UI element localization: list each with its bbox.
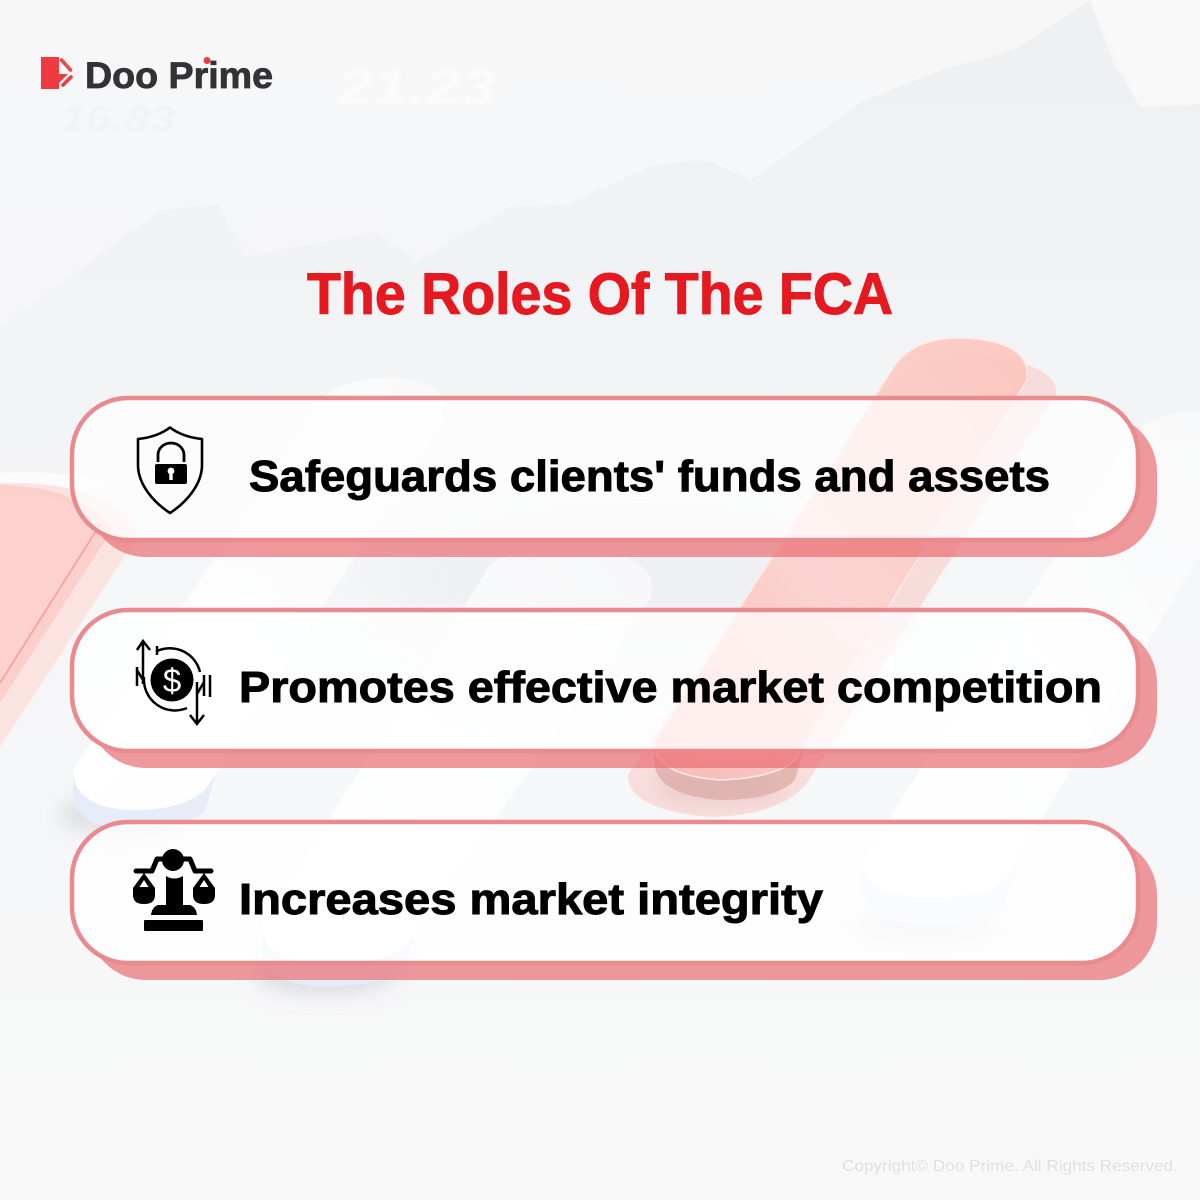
panel: competition	[72, 610, 1138, 751]
decorative red pill: centre	[628, 338, 1056, 817]
icon: balance scales	[133, 849, 215, 931]
text: safeguards: Safeguards clients' funds and assets	[249, 452, 1050, 501]
card drop shadows	[88, 414, 1157, 980]
logo: Doo Prime	[41, 55, 273, 96]
decorative white pill: middle	[255, 550, 652, 995]
logo dot	[204, 57, 210, 64]
faint background numbers: 21.23	[337, 59, 496, 115]
logo wordmark: Doo Prime	[85, 55, 273, 96]
text: competition: Promotes effective market competition	[239, 663, 1102, 712]
faint background numbers: 16.83	[60, 98, 176, 139]
text: integrity: Increases market integrity	[239, 875, 824, 924]
decorative red pill: left	[0, 472, 138, 747]
faint background numbers	[60, 59, 496, 139]
icon: logo mark	[41, 57, 71, 89]
copyright: Copyright© Doo Prime. All Rights Reserved.	[842, 1158, 1178, 1175]
icon: dollar with arrows	[137, 641, 210, 724]
icon: shield with padlock	[138, 428, 202, 513]
panel: safeguards	[72, 398, 1138, 540]
decorative white pill: left	[56, 378, 443, 835]
decorative white pill: right	[855, 412, 1200, 941]
icon: dollar with arrows: $	[163, 662, 181, 699]
panel: integrity	[72, 822, 1138, 963]
title: The Roles Of The FCA	[307, 262, 893, 327]
